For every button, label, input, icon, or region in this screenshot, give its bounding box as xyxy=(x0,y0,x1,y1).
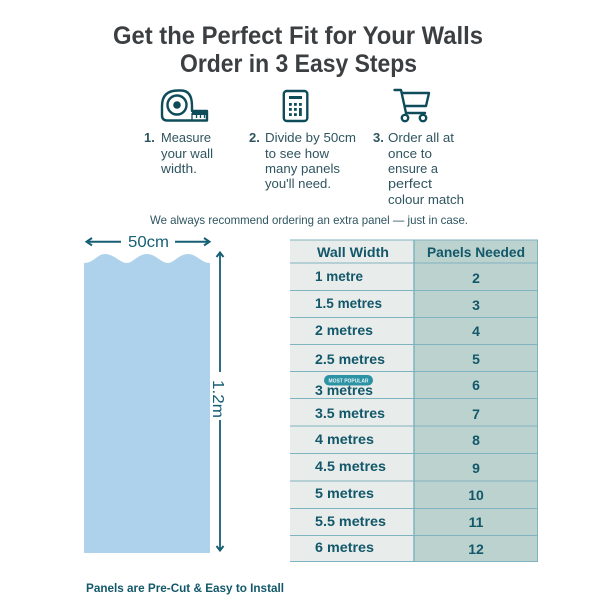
wall width column: 6 metres xyxy=(315,540,374,555)
panels needed column: 6 xyxy=(472,377,480,393)
height label: 1.2m xyxy=(209,252,226,550)
step 2: to see how xyxy=(265,146,330,161)
icon: shopping cart xyxy=(394,90,429,121)
step 2: 2. xyxy=(249,130,260,145)
width label: 50cm xyxy=(86,234,210,251)
icon: calculator xyxy=(284,91,307,121)
title: Order in 3 Easy Steps xyxy=(180,50,417,78)
table header: Panels Needed xyxy=(427,244,525,260)
title xyxy=(113,22,483,78)
caption: Panels are Pre-Cut & Easy to Install xyxy=(86,581,284,595)
wall width column xyxy=(315,269,386,555)
step 3: perfect xyxy=(388,176,432,191)
panels needed column: 8 xyxy=(472,432,480,448)
step 1: 1. xyxy=(144,130,155,145)
table header: Wall Width xyxy=(317,244,389,260)
icon: tape measure xyxy=(162,90,208,120)
panels needed column xyxy=(468,270,484,557)
wall width column: 4 metres xyxy=(315,432,374,447)
table xyxy=(290,240,538,562)
wall width column: 3 metres xyxy=(315,383,373,398)
step 2 xyxy=(249,130,356,191)
panels needed column: 12 xyxy=(468,541,484,557)
wall width column: 1 metre xyxy=(315,269,363,284)
step 3: Order all at xyxy=(388,130,454,145)
badge: most popular xyxy=(324,375,373,386)
width label: 50cm: 50cm xyxy=(128,234,169,251)
step 1: your wall xyxy=(161,146,213,161)
step 3: ensure a xyxy=(388,161,439,176)
table header xyxy=(317,244,525,260)
panels needed column: 3 xyxy=(472,297,480,313)
panels needed column: 7 xyxy=(472,406,480,422)
step 2: Divide by 50cm xyxy=(265,130,356,145)
step 3: 3. xyxy=(373,130,384,145)
step 3: once to xyxy=(388,146,432,161)
step 1: Measure xyxy=(161,130,211,145)
wallpaper panel xyxy=(84,254,210,553)
wall width column: 1.5 metres xyxy=(315,296,382,311)
step 3 xyxy=(373,130,464,207)
badge: most popular: MOST POPULAR xyxy=(328,378,369,384)
step 1 xyxy=(144,130,213,176)
wall width column: 2 metres xyxy=(315,323,373,338)
panels needed column: 5 xyxy=(472,351,480,367)
height label: 1.2m: 1.2m xyxy=(209,380,226,418)
wall width column: 5.5 metres xyxy=(315,514,386,529)
panels needed column: 4 xyxy=(472,323,480,339)
step 2: you'll need. xyxy=(265,176,331,191)
panels needed column: 11 xyxy=(469,514,484,530)
panels needed column: 9 xyxy=(472,460,480,476)
step 2: many panels xyxy=(265,161,340,176)
step 1: width. xyxy=(160,161,197,176)
wall width column: 3.5 metres xyxy=(315,406,385,421)
panels needed column: 2 xyxy=(472,270,480,286)
note: extra panel: We always recommend ordering an extra panel — just in case. xyxy=(150,213,468,227)
wall width column: 4.5 metres xyxy=(315,459,386,474)
title: Get the Perfect Fit for Your Walls xyxy=(113,22,483,50)
step 3: colour match xyxy=(388,192,464,207)
wall width column: 5 metres xyxy=(315,486,374,501)
panels needed column: 10 xyxy=(468,487,484,503)
wall width column: 2.5 metres xyxy=(315,352,385,367)
